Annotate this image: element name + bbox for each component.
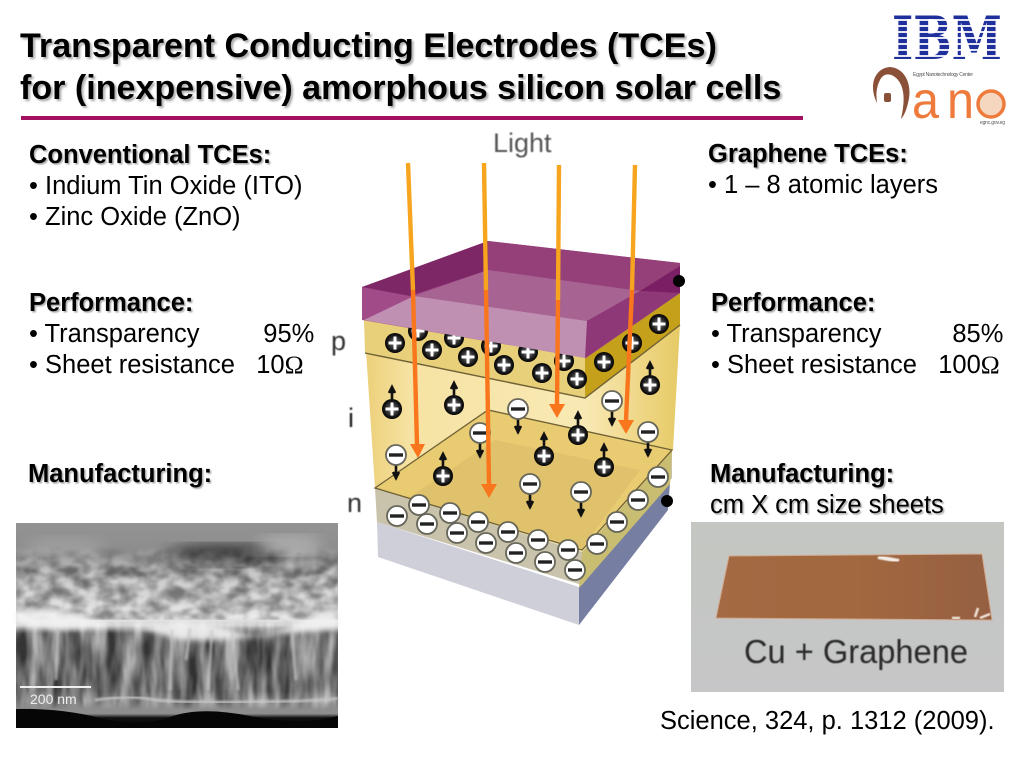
- layer: p-type region: [364, 293, 680, 398]
- logo: Egypt Nanotechnology Center: [873, 67, 1005, 130]
- right panel: performance: Performance: • Transparency 85% • Sheet resistance 100Ω: [711, 289, 1003, 379]
- citation: Science, 324, p. 1312 (2009).: [660, 707, 995, 735]
- photo: SEM cross-section of TCO film: [16, 523, 338, 728]
- layer: purple electrode: [362, 241, 680, 358]
- photo: copper foil with graphene: [691, 522, 1004, 692]
- logo: Egypt Nanotechnology Center: Egypt Nanotechnology Center: [913, 72, 973, 78]
- logo: Egypt Nanotechnology Center: n: [947, 72, 974, 130]
- left panel: manufacturing heading: Manufacturing:: [28, 460, 212, 488]
- scale label: 200 nm: [30, 691, 77, 707]
- left panel: performance: Performance: • Transparency 95% • Sheet resistance 10Ω: [29, 289, 314, 379]
- label: n: n: [347, 488, 362, 518]
- diagram: solar cell layers: [331, 128, 685, 625]
- charge carriers: holes: [364, 296, 669, 486]
- right panel: graphene TCEs: Graphene TCEs: • 1 – 8 atomic layers: [708, 140, 938, 199]
- layer: intrinsic body: [364, 290, 680, 552]
- charge carriers: electrons: [386, 275, 685, 580]
- photo caption: Cu + Graphene: [744, 633, 968, 670]
- layer: n plane: [375, 410, 672, 550]
- title rule: [21, 116, 803, 120]
- logo: Egypt Nanotechnology Center: a: [912, 72, 939, 130]
- left panel: conventional TCEs: Conventional TCEs: • Indium Tin Oxide (ITO) • Zinc Oxide (ZnO): [29, 141, 302, 231]
- label: p: p: [331, 326, 346, 356]
- substrate: [377, 483, 670, 625]
- light arrows: [408, 163, 635, 498]
- label: i: i: [348, 403, 354, 433]
- label: Light: Light: [493, 128, 552, 158]
- logo: Egypt Nanotechnology Center: egnc.gov.eg: [980, 120, 1005, 126]
- right panel: manufacturing: Manufacturing: cm X cm size sheets: [710, 460, 944, 519]
- layer: n-type floor: [375, 450, 672, 588]
- title: Transparent Conducting Electrodes (TCEs) for (inexpensive) amorphous silicon solar cells: [20, 27, 781, 107]
